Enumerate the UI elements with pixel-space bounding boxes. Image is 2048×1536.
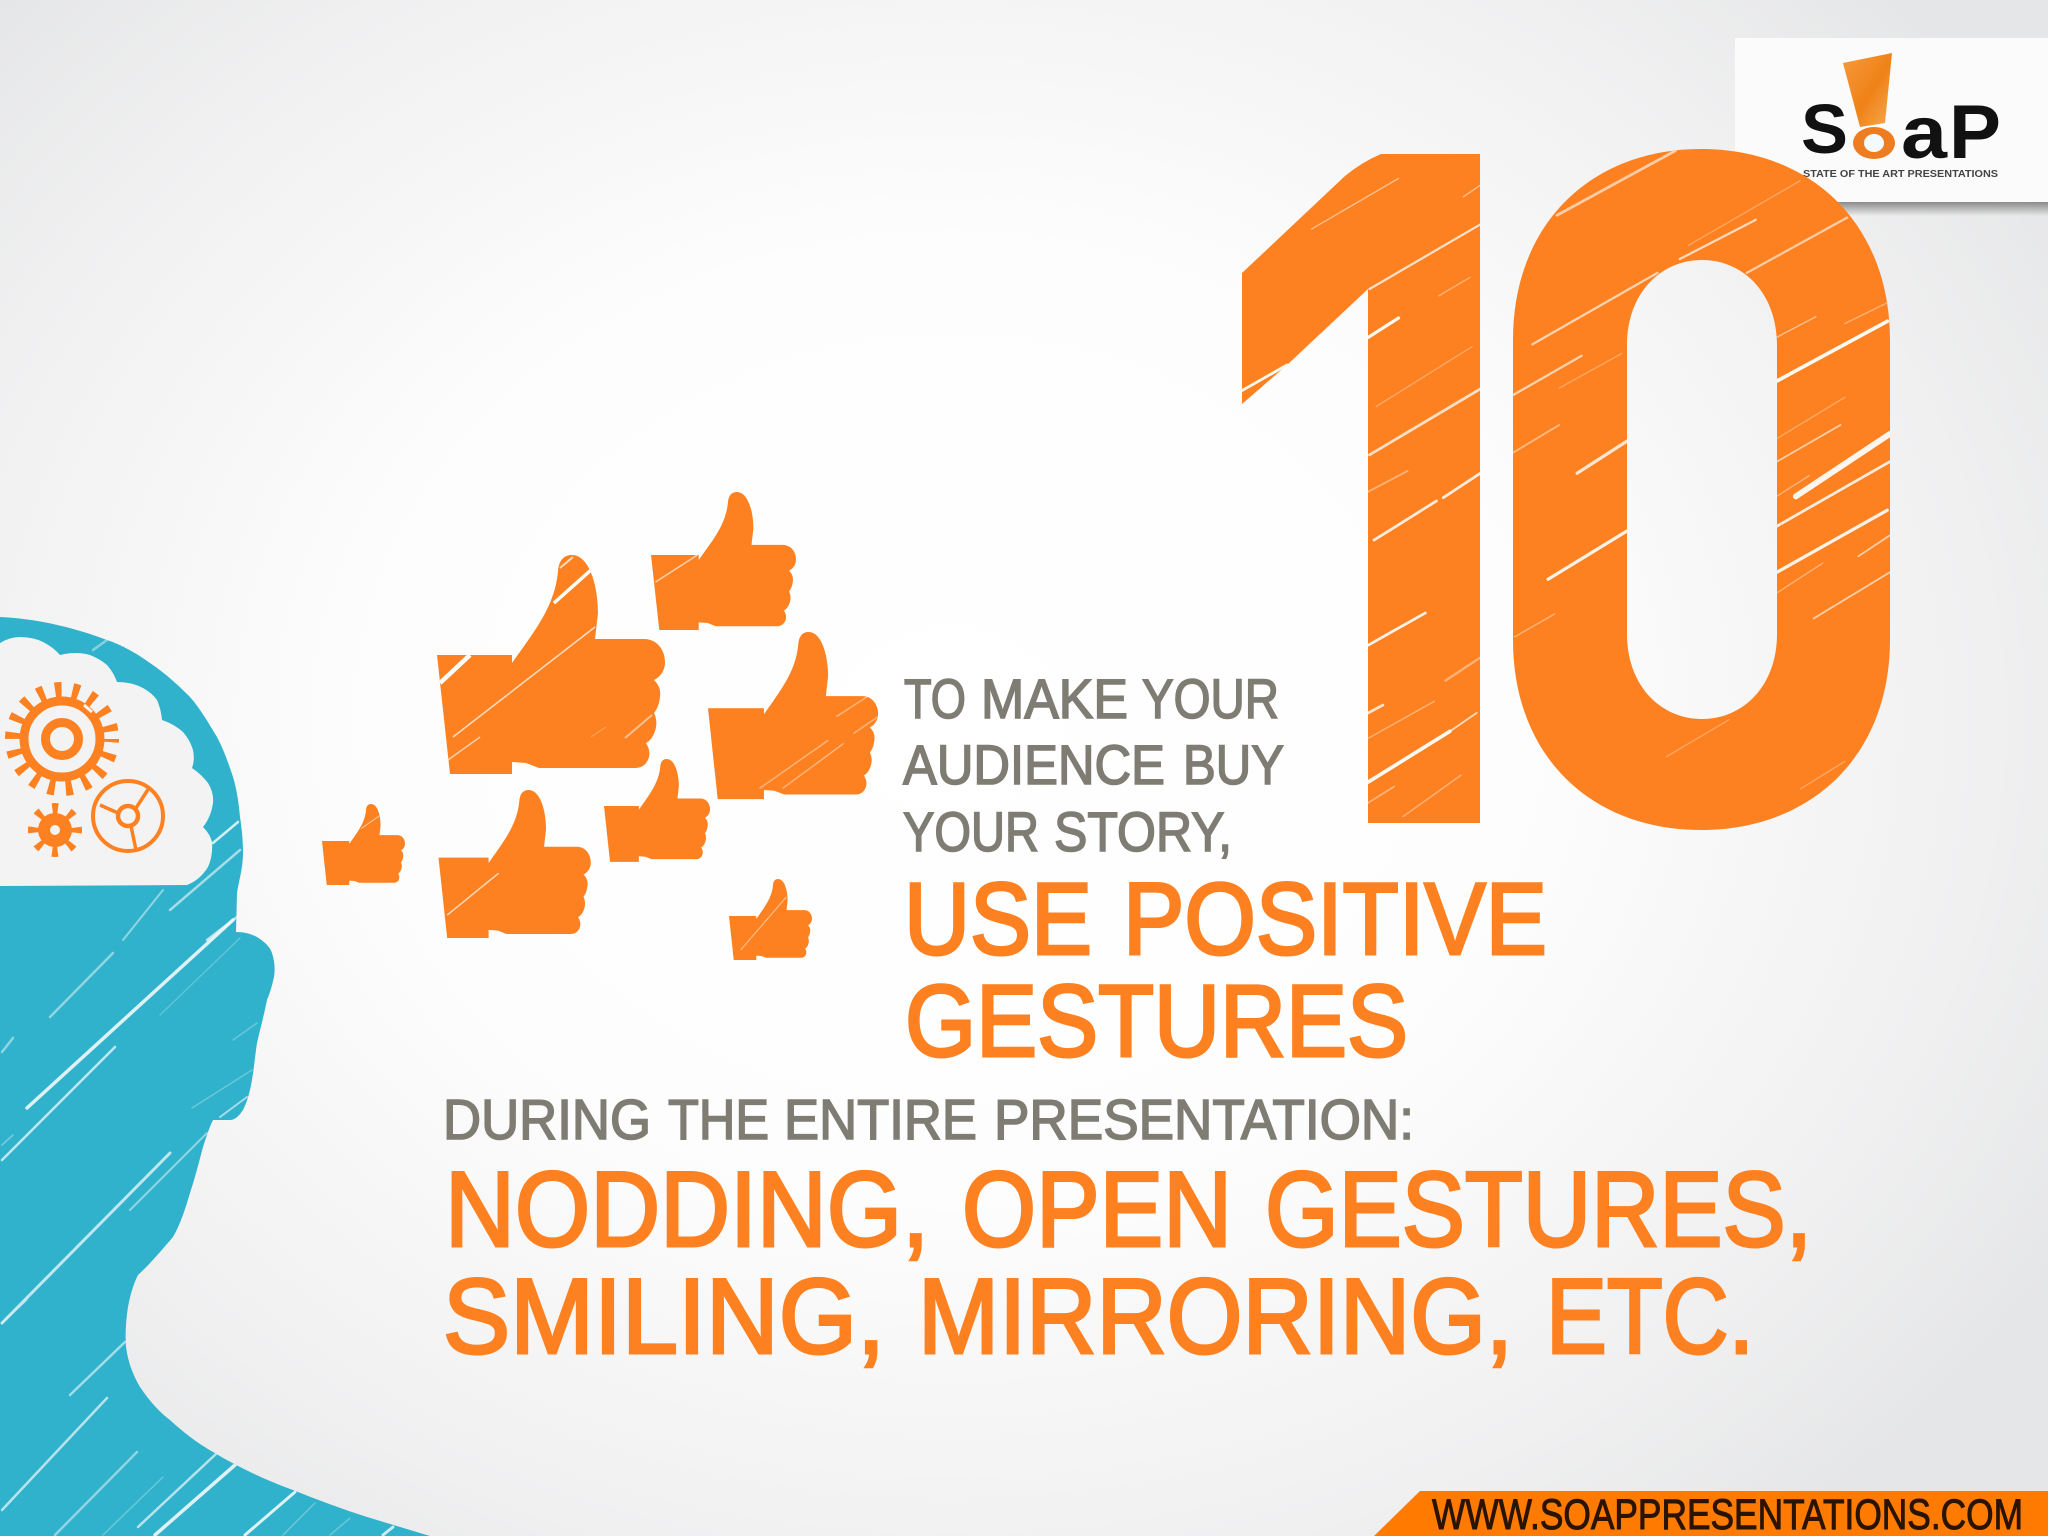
examples text: ETC.	[1546, 1256, 1754, 1376]
icon: middle thumbs up	[604, 759, 710, 862]
intro text	[903, 667, 1284, 863]
examples text: NODDING,	[445, 1149, 929, 1269]
examples text: MIRRORING,	[918, 1256, 1513, 1376]
intro text: MAKE	[981, 667, 1128, 730]
subheading text	[443, 1088, 1414, 1152]
subheading text: DURING	[443, 1088, 651, 1152]
subheading text: THE	[668, 1088, 769, 1152]
examples text: GESTURES,	[1265, 1149, 1812, 1269]
logo letter o	[1853, 127, 1895, 159]
examples text	[443, 1149, 1812, 1376]
icon: bottom small thumbs up	[729, 879, 812, 960]
headline: use positive gestures	[904, 862, 1547, 1078]
logo box	[1735, 38, 2048, 216]
intro text: AUDIENCE	[903, 733, 1165, 796]
intro text: BUY	[1183, 733, 1284, 796]
tip number 10	[1242, 149, 1890, 830]
icon: left small thumbs up	[322, 804, 405, 885]
logo wordmark: a	[1901, 91, 1948, 174]
logo exclamation mark	[1843, 53, 1892, 127]
icon: large gear	[13, 690, 111, 788]
intro text: STORY,	[1054, 800, 1232, 863]
intro text: YOUR	[1142, 667, 1279, 730]
website footer banner	[1374, 1491, 2048, 1536]
subheading text: ENTIRE	[784, 1088, 977, 1152]
icon: large thumbs up	[437, 555, 665, 774]
examples text: OPEN	[962, 1149, 1232, 1269]
icon: small gear	[34, 809, 76, 851]
digit 1	[1242, 154, 1480, 823]
head silhouette	[0, 617, 430, 1536]
logo wordmark: S	[1801, 90, 1848, 168]
logo wordmark	[1801, 90, 2001, 175]
brain cloud	[0, 637, 213, 886]
logo tagline: STATE OF THE ART PRESENTATIONS	[1803, 168, 1998, 180]
digit 0	[1513, 149, 1890, 830]
icon: right thumbs up	[708, 632, 878, 799]
headline: use positive gestures: GESTURES	[905, 964, 1408, 1078]
icon: lower thumbs up	[438, 790, 591, 938]
examples text: SMILING,	[443, 1256, 885, 1376]
logo wordmark: P	[1949, 90, 2001, 175]
subheading text: PRESENTATION:	[994, 1088, 1414, 1152]
headline: use positive gestures: POSITIVE	[1123, 862, 1547, 976]
icon: top thumbs up	[651, 492, 796, 630]
intro text: TO	[904, 667, 966, 730]
intro text: YOUR	[903, 800, 1039, 863]
icon: wheel gear	[93, 781, 163, 851]
headline: use positive gestures: USE	[904, 862, 1092, 976]
